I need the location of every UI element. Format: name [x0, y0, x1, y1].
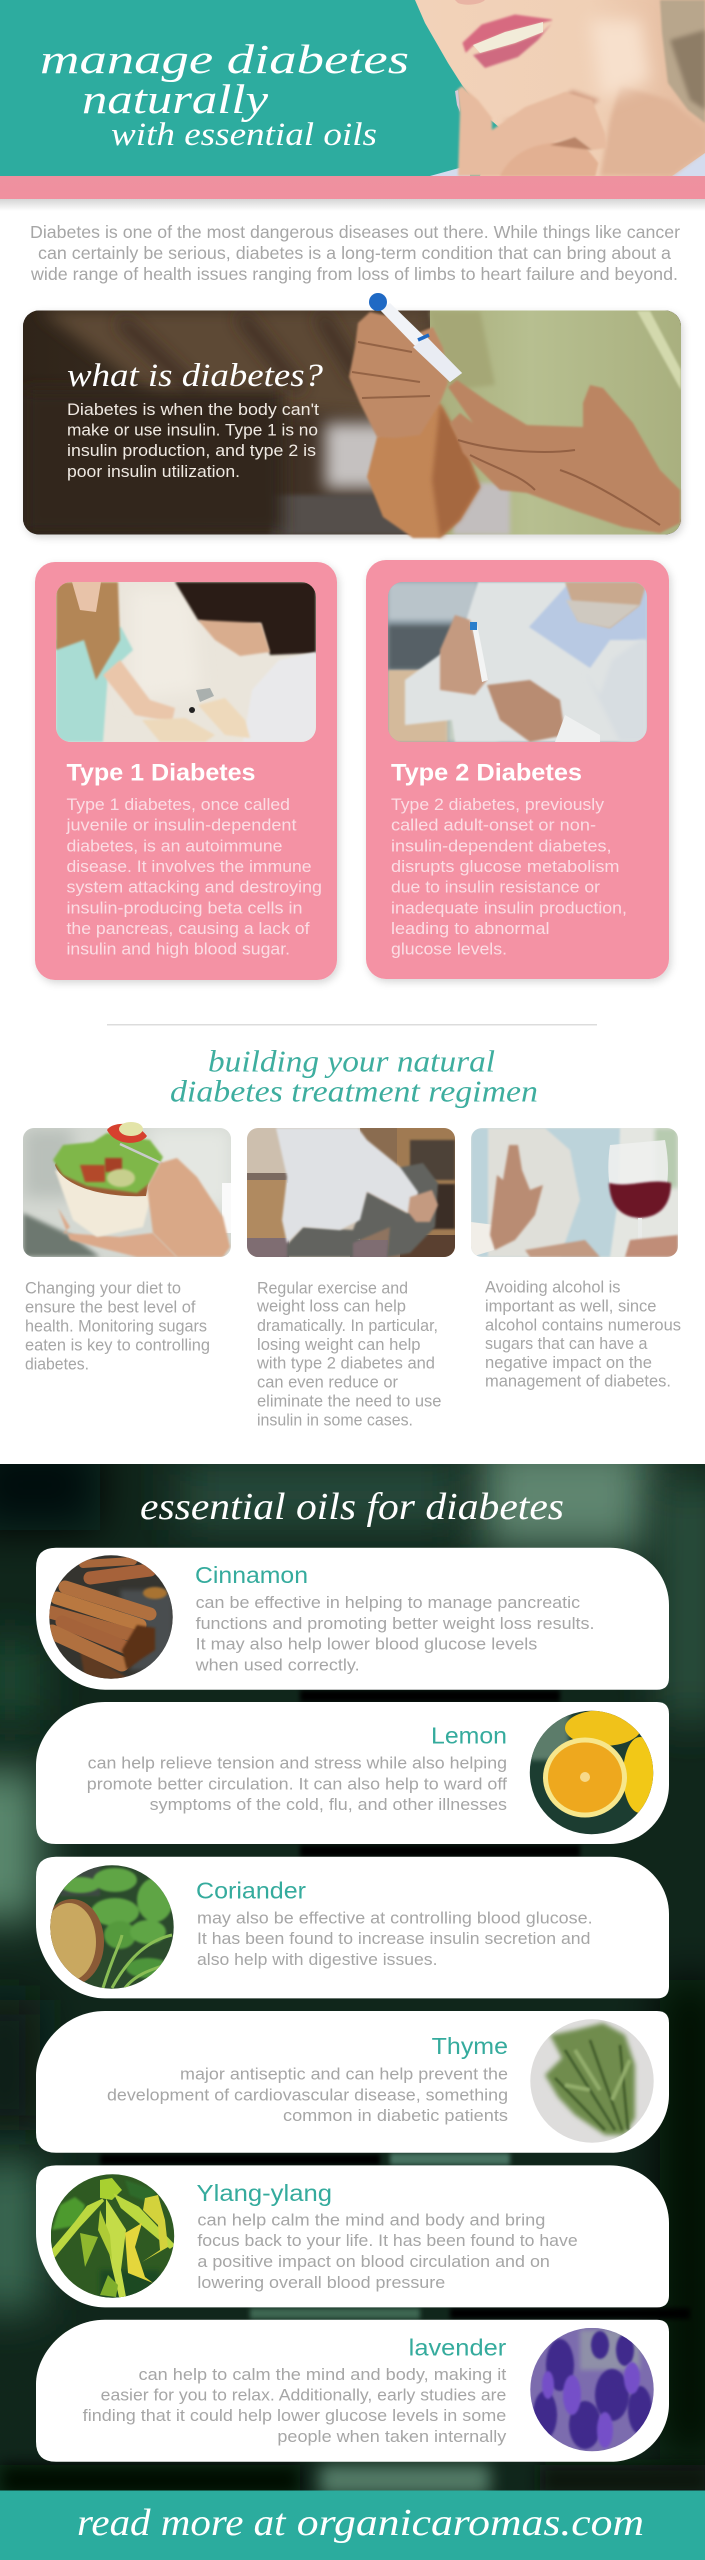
description: can be effective in helping to manage pancreatic	[196, 1594, 580, 1612]
photo: finger prick background	[23, 310, 681, 535]
panel: alcohol	[471, 1128, 681, 1391]
photo: older man testing blood	[388, 582, 647, 742]
body text: insulin production, and type 2 is	[67, 441, 316, 460]
body text	[67, 400, 319, 481]
body text: sugars that can have a	[485, 1335, 648, 1353]
body text: make or use insulin. Type 1 is no	[67, 421, 318, 440]
card: cinnamon	[36, 1548, 669, 1690]
card: lavender	[36, 2320, 669, 2462]
body text: Regular exercise and	[257, 1279, 408, 1297]
body text: Changing your diet to	[25, 1279, 181, 1297]
body text: insulin and high blood sugar.	[66, 940, 290, 958]
description	[87, 1755, 507, 1814]
photo: coriander leaves and seeds	[40, 1865, 174, 1989]
description: lowering overall blood pressure	[197, 2274, 445, 2292]
footer banner	[0, 2490, 705, 2560]
panel: diet	[23, 1122, 232, 1373]
body text: dramatically. In particular,	[257, 1317, 438, 1335]
body text: can even reduce or	[257, 1374, 398, 1392]
description: finding that it could help lower glucose levels in some	[83, 2407, 506, 2425]
body text: Avoiding alcohol is	[485, 1279, 620, 1297]
name: Ylang-ylang	[196, 2180, 332, 2206]
footer text	[77, 2502, 644, 2544]
photo: refusing wine	[471, 1128, 678, 1257]
description: It has been found to increase insulin secretion and	[197, 1930, 590, 1948]
intro text: wide range of health issues ranging from loss of limbs to heart failure and beyond.	[30, 264, 678, 284]
card: coriander	[36, 1857, 669, 1998]
intro text	[30, 222, 680, 284]
description: development of cardiovascular disease, something	[107, 2086, 508, 2104]
body text: poor insulin utilization.	[67, 462, 240, 481]
heading: building your natural diabetes treatment regimen	[170, 1044, 538, 1109]
panel: type 1 diabetes	[35, 562, 337, 980]
intro text: Diabetes is one of the most dangerous diseases out there. While things like cancer	[30, 222, 680, 242]
body text	[256, 1279, 442, 1430]
body text: insulin in some cases.	[257, 1412, 413, 1430]
body text: alcohol contains numerous	[485, 1316, 681, 1334]
description	[195, 1594, 594, 1674]
body text: with type 2 diabetes and	[256, 1355, 435, 1373]
photo: salad bowl	[23, 1128, 232, 1257]
body text: eliminate the need to use	[257, 1393, 442, 1411]
description: symptoms of the cold, flu, and other illnesses	[150, 1796, 507, 1814]
heading: essential oils for diabetes: essential oils for diabetes	[140, 1486, 564, 1528]
icon: tomato on fork	[107, 1122, 147, 1143]
footer text: organicaromas.com	[297, 2502, 644, 2544]
panel: essential oils dark background	[0, 1440, 705, 2495]
photo: lemon	[529, 1710, 657, 1835]
body text: diabetes, is an autoimmune	[66, 837, 282, 855]
header banner	[0, 0, 705, 211]
photo: cinnamon sticks	[49, 1555, 173, 1679]
body text: insulin-dependent diabetes,	[391, 837, 612, 855]
body text: diabetes.	[25, 1355, 89, 1373]
body text: the pancreas, causing a lack of	[66, 920, 310, 938]
panel: type 2 diabetes	[366, 560, 669, 979]
body text	[65, 796, 322, 958]
body text: health. Monitoring sugars	[25, 1317, 207, 1335]
body text: inadequate insulin production,	[391, 899, 627, 917]
title: with essential oils	[111, 117, 377, 153]
name: Coriander	[196, 1877, 306, 1903]
description: may also be effective at controlling blood glucose.	[197, 1910, 593, 1928]
body text: system attacking and destroying	[66, 879, 322, 897]
photo: nurse and girl	[56, 582, 316, 742]
body text	[485, 1279, 681, 1391]
body text: leading to abnormal	[391, 920, 550, 938]
description: easier for you to relax. Additionally, early studies are	[101, 2386, 506, 2404]
body text: Diabetes is when the body can't	[67, 400, 319, 419]
panel: exercise	[247, 1128, 455, 1430]
body text: weight loss can help	[256, 1298, 406, 1316]
body text: disrupts glucose metabolism	[391, 858, 620, 876]
card: thyme	[36, 2011, 669, 2153]
body text: eaten is key to controlling	[25, 1337, 210, 1355]
name: Cinnamon	[195, 1562, 308, 1588]
body text: glucose levels.	[391, 940, 507, 958]
body text: ensure the best level of	[25, 1298, 196, 1316]
photo: woman touching chin	[415, 0, 705, 176]
description	[197, 1910, 593, 1969]
body text: disease. It involves the immune	[66, 858, 312, 876]
body text: juvenile or insulin-dependent	[65, 817, 297, 835]
description: also help with digestive issues.	[197, 1951, 438, 1969]
description: a positive impact on blood circulation and on	[197, 2253, 550, 2271]
title	[40, 36, 409, 153]
body text: important as well, since	[485, 1298, 656, 1316]
panel: what is diabetes	[23, 293, 681, 538]
heading: Type 2 Diabetes	[391, 760, 582, 787]
photo: lavender field	[530, 2328, 654, 2452]
name: lavender	[409, 2334, 507, 2360]
heading: building your natural diabetes treatment regimen: diabetes treatment regimen	[170, 1074, 538, 1109]
description: can help calm the mind and body and bring	[197, 2212, 545, 2230]
body text	[25, 1279, 210, 1373]
card: lemon	[36, 1702, 669, 1844]
body text: negative impact on the	[485, 1354, 652, 1372]
description: It may also help lower blood glucose levels	[196, 1635, 537, 1653]
card: ylang-ylang	[36, 2165, 669, 2307]
description	[197, 2212, 578, 2292]
body text: losing weight can help	[257, 1336, 420, 1354]
description: people when taken internally	[277, 2428, 507, 2446]
description: functions and promoting better weight loss results.	[196, 1615, 594, 1633]
description	[107, 2065, 508, 2125]
description: focus back to your life. It has been found to have	[197, 2232, 578, 2250]
heading: what is diabetes: what is diabetes?	[67, 358, 324, 394]
description: can help relieve tension and stress while also helping	[88, 1755, 507, 1773]
title: manage diabetes	[40, 36, 409, 82]
heading: building your natural diabetes treatment regimen: building your natural	[208, 1044, 495, 1079]
body text	[391, 796, 627, 958]
title: naturally	[82, 76, 269, 122]
description: can help to calm the mind and body, making it	[138, 2366, 507, 2384]
body text: called adult-onset or non-	[391, 817, 596, 835]
footer text: read more at	[77, 2502, 287, 2544]
description: common in diabetic patients	[283, 2107, 508, 2125]
name: Lemon	[431, 1722, 507, 1748]
photo: ylang-ylang flower	[51, 2174, 175, 2300]
description: when used correctly.	[195, 1656, 360, 1674]
photo: thyme bunch	[530, 2019, 654, 2143]
body text: Type 2 diabetes, previously	[391, 796, 605, 814]
description	[83, 2366, 507, 2446]
description: major antiseptic and can help prevent the	[180, 2065, 508, 2083]
body text: Type 1 diabetes, once called	[66, 796, 290, 814]
name: Thyme	[432, 2033, 508, 2059]
description: promote better circulation. It can also help to ward off	[87, 1776, 507, 1794]
heading: Type 1 Diabetes	[66, 760, 256, 787]
body text: insulin-producing beta cells in	[66, 899, 302, 917]
intro text: can certainly be serious, diabetes is a long-term condition that can bring about a	[38, 243, 671, 263]
body text: management of diabetes.	[485, 1373, 671, 1391]
photo: stretching woman	[247, 1128, 455, 1257]
icon: hand with lancing pen	[349, 293, 680, 538]
body text: due to insulin resistance or	[391, 879, 601, 897]
